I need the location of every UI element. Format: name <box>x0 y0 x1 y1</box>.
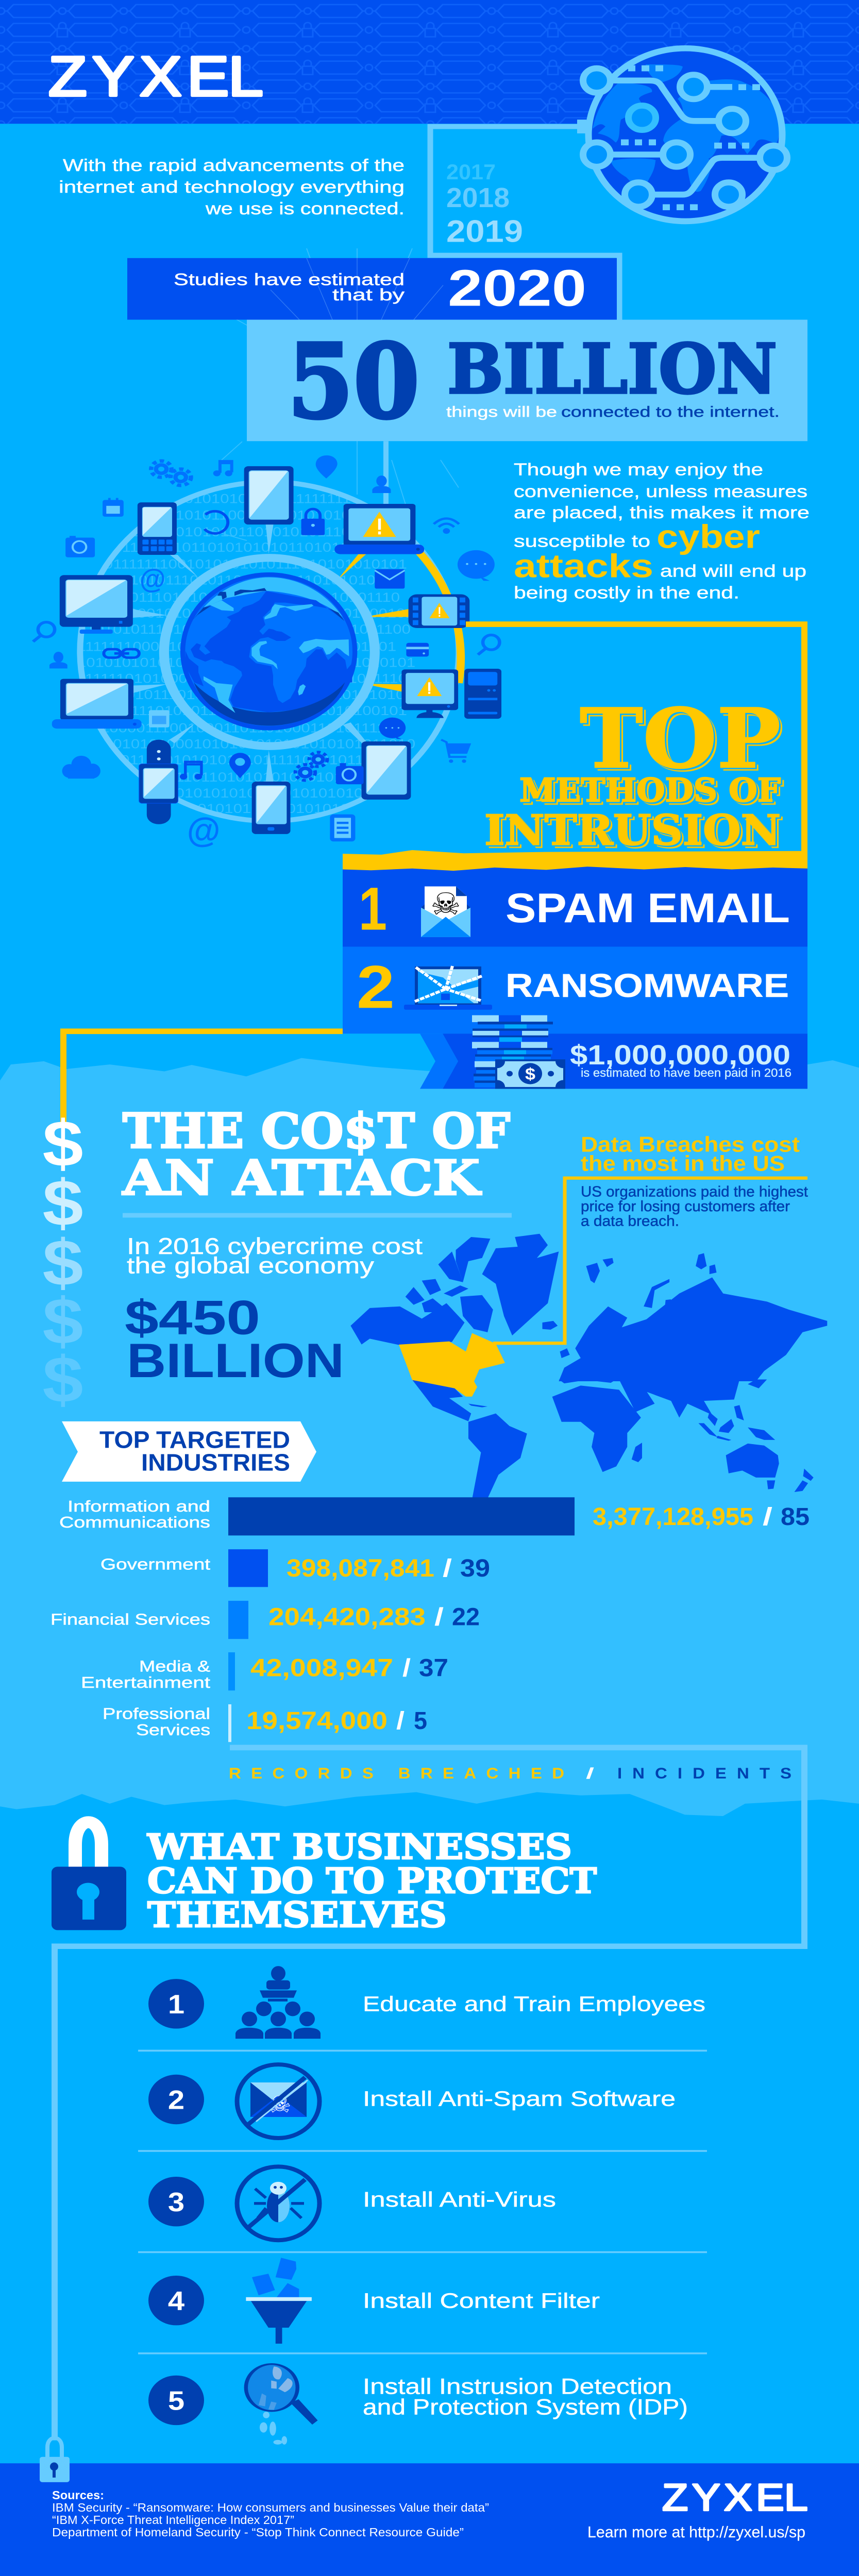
yellow alert arc <box>418 552 461 683</box>
icon: calendar <box>103 498 124 517</box>
warning paragraph: being costly in the end. <box>514 583 739 602</box>
ransom paid ribbon <box>420 1015 807 1089</box>
heading: the cost of an attack: AN ATTACK <box>122 1150 482 1206</box>
icon: money stack <box>472 1015 565 1089</box>
global cost statement: In 2016 cybercrime cost <box>127 1233 423 1259</box>
heading: top methods of intrusion <box>484 690 781 855</box>
dollar signs column: $ <box>43 1107 83 1180</box>
row: information and communications: 3,377,128,955 <box>593 1502 753 1530</box>
step 2: install anti-spam software <box>148 2064 676 2138</box>
icon: camera dark <box>336 763 364 784</box>
intro text: internet and technology everything <box>59 178 405 197</box>
binary digits: 01101011010101010101011111010101110101 <box>77 753 407 767</box>
global cost statement: BILLION <box>127 1334 344 1388</box>
row: government <box>100 1549 490 1587</box>
heading: top methods of intrusion: TOP <box>580 690 781 787</box>
binary digits: 01010101010101011001101101010101010101 <box>77 508 413 522</box>
step 4: install content filter <box>148 2258 600 2344</box>
icon: padlock <box>301 509 325 535</box>
step 2: install anti-spam software: 2 <box>168 2085 184 2115</box>
ice and desert highlights <box>204 600 349 713</box>
dollar signs column: $ <box>43 1284 83 1358</box>
binary digits: 11110000111001000110110100011010111100 <box>77 720 403 735</box>
binary digits: 01010101010001010101010101010101011010 <box>77 737 415 751</box>
icon: refresh <box>205 511 228 533</box>
sources <box>52 2489 489 2539</box>
icon: mail <box>375 569 405 589</box>
small floating icons <box>33 455 499 850</box>
method 1 panel: spam email <box>343 850 807 947</box>
icon: small padlock on line <box>40 2438 70 2482</box>
row: financial services: 22 <box>452 1603 480 1631</box>
icon: chat bubble <box>458 550 495 581</box>
binary digits: 01010111010101101010101011010101010101 <box>77 540 412 554</box>
binary digits: 01000110101110101101111111110101010110 <box>77 572 401 587</box>
list dividers <box>138 2050 707 2354</box>
chart legend: INCIDENTS <box>617 1765 791 1782</box>
icon: money stack: $ <box>525 1065 535 1083</box>
footer band <box>0 2463 859 2576</box>
step 1: educate and train employees <box>148 1966 705 2039</box>
top highlight <box>204 578 343 617</box>
icon: calculator <box>149 710 170 727</box>
ransom paid ribbon: is estimated to have been paid in 2016 <box>581 1066 791 1080</box>
icon: magnifier with footprints <box>246 2364 318 2445</box>
icon: shopping cart <box>441 740 471 763</box>
dollar signs column: $ <box>43 1166 83 1240</box>
intro text: we use is connected. <box>205 199 405 218</box>
icon: person <box>372 476 391 493</box>
row: media and entertainment: / <box>402 1654 411 1682</box>
icon: map pin dark <box>229 753 251 778</box>
binary digits: 01111101011101011100101101010110101010 <box>77 687 405 702</box>
brush band <box>343 850 807 871</box>
icon: large padlock <box>52 1822 126 1930</box>
step 2: install anti-spam software: Install Anti-Spam Software <box>363 2088 676 2111</box>
heading: what businesses can do: CAN DO TO PROTECT <box>147 1860 597 1901</box>
icon: spam envelope <box>421 886 470 937</box>
yellow alert spikes <box>337 554 409 691</box>
heading: top methods of intrusion: METHODS OF <box>519 771 781 809</box>
label ransomware: RANSOMWARE <box>506 967 789 1004</box>
logo: zyxel top: ZYXEL <box>48 45 263 108</box>
binary digits: 01110101110101010101010101010101010101 <box>77 801 412 816</box>
dollar signs column: $ <box>43 1343 83 1416</box>
heading: what businesses can do: THEMSELVES <box>147 1894 447 1935</box>
row: media and entertainment: Entertainment <box>81 1674 210 1691</box>
icon: music note dark <box>180 762 202 779</box>
warning paragraph <box>514 460 810 602</box>
row: government: Government <box>100 1555 210 1573</box>
50 billion box: connected to the internet. <box>561 404 780 420</box>
usa highlight <box>399 1333 505 1397</box>
callout: data breaches: a data breach. <box>581 1213 679 1229</box>
warning paragraph: convenience, unless measures <box>514 482 807 501</box>
outer ring <box>80 482 459 821</box>
icon: laptop left <box>52 679 142 728</box>
step 5: install instrusion detection: 5 <box>168 2386 184 2416</box>
50 billion box: BILLION <box>447 329 777 410</box>
number 1: 1 <box>359 875 387 943</box>
icon: circuit globe <box>577 48 787 221</box>
icon: map pin <box>316 455 338 479</box>
step 5: install instrusion detection <box>148 2364 688 2445</box>
row: information and communications: Communications <box>59 1514 210 1531</box>
binary digits: 10101010101010101011010101011101010111 <box>77 524 411 539</box>
studies box: 2020 <box>448 260 586 317</box>
icon: phone top <box>244 466 294 524</box>
row: media and entertainment: 42,008,947 <box>250 1654 393 1682</box>
step 4: install content filter: Install Content Filter <box>363 2290 600 2313</box>
chart legend: RECORDS BREACHED <box>229 1765 564 1782</box>
binary digits: 10101010101010101010101010101010101010 <box>77 786 416 800</box>
warning paragraph: Though we may enjoy the <box>514 460 763 479</box>
ribbon: top targeted industries <box>62 1421 316 1482</box>
sources: Department of Homeland Security - “Stop Think Connect Resource Guide” <box>52 2526 464 2539</box>
years list: 2018 <box>446 183 510 213</box>
heading: top methods of intrusion: INTRUSION <box>484 806 781 855</box>
dollar signs column <box>43 1107 83 1416</box>
callout: data breaches: the most in the US <box>581 1152 785 1176</box>
inner ring <box>164 558 375 746</box>
connector frame: chart to protection section <box>55 1748 804 2441</box>
sources: Sources: <box>52 2489 104 2502</box>
learn more link: Learn more at http://zyxel.us/sp <box>587 2523 805 2541</box>
years list: 2019 <box>446 214 523 249</box>
row: information and communications <box>59 1497 810 1535</box>
icon: gears dark <box>295 752 327 781</box>
yellow connector: usa to callout <box>493 1178 807 1343</box>
bottom shadow <box>194 682 345 726</box>
middle lighter wave background <box>0 1058 859 1816</box>
icon: blocked spam envelope: ☠ <box>268 2091 291 2118</box>
icon: teacher and audience <box>235 1966 321 2039</box>
icon: film tablet with warning <box>409 595 469 628</box>
step 4: install content filter: 4 <box>168 2286 185 2316</box>
row: professional services: Services <box>136 1721 210 1738</box>
bar chart: targeted industries <box>50 1497 810 1742</box>
icon: desktop tower <box>464 669 501 719</box>
icon: cloud <box>62 756 100 778</box>
land masses <box>191 591 352 712</box>
studies box: Studies have estimated <box>174 270 405 289</box>
icon: chain link <box>104 649 139 657</box>
callout: data breaches: Data Breaches cost <box>581 1133 800 1157</box>
icon: credit card <box>406 643 429 657</box>
warning paragraph: cyber <box>656 518 760 555</box>
binary digits: 01100001110101011010101111111110101110 <box>77 590 400 604</box>
heading: what businesses can do: WHAT BUSINESSES <box>147 1826 572 1867</box>
row: government: / <box>443 1554 452 1582</box>
icon: at sign bottom: @ <box>187 811 220 850</box>
binary digits: 11111101010001010101010101010101011110 <box>77 671 407 686</box>
row: media and entertainment: 37 <box>419 1654 448 1682</box>
number 2: 2 <box>357 953 395 1021</box>
icon: music note <box>213 461 232 476</box>
row: financial services <box>50 1601 480 1639</box>
icon: smartwatch <box>139 740 178 824</box>
heading: the cost of an attack: THE CO$T OF <box>123 1103 510 1159</box>
step 5: install instrusion detection: Install Instrusion Detection <box>363 2374 672 2399</box>
ribbon: top targeted industries: TOP TARGETED <box>99 1427 290 1453</box>
row: professional services: / <box>396 1707 405 1735</box>
binary digits: 01010101000110110101010101010101010110 <box>77 770 413 784</box>
connected world illustration <box>77 482 461 821</box>
connected devices and icons <box>33 455 501 850</box>
yellow frame around methods <box>466 624 804 856</box>
icon: monitor left <box>60 575 133 634</box>
binary digits <box>77 492 416 816</box>
icon: at sign: @ <box>140 564 165 594</box>
years list: 2017 <box>446 160 496 184</box>
icon: wifi <box>434 518 459 533</box>
heading divider <box>123 1213 512 1217</box>
binary digits: 01010101010101010101011111111111010101 <box>77 492 405 506</box>
row: media and entertainment <box>81 1652 448 1691</box>
ribbon: top targeted industries: INDUSTRIES <box>141 1449 290 1476</box>
icon: keypad phone <box>138 502 177 555</box>
studies box <box>127 258 617 320</box>
step 3: install anti-virus <box>148 2166 556 2240</box>
callout: data breaches <box>581 1133 809 1229</box>
binary digits: 11111110000101011110111101011111101001 <box>77 639 396 654</box>
step 1: educate and train employees: Educate and Train Employees <box>363 1993 705 2016</box>
chart legend: / <box>586 1765 595 1782</box>
ransom paid ribbon: $1,000,000,000 <box>570 1040 790 1071</box>
header band <box>0 0 859 124</box>
icon: chat dark <box>379 718 406 739</box>
row: financial services: / <box>434 1603 444 1631</box>
50 billion box: 50 <box>288 321 419 442</box>
dark slivers <box>192 588 344 621</box>
icon: gears top <box>151 461 191 485</box>
label spam email: SPAM EMAIL <box>506 886 790 931</box>
sources: IBM Security - “Ransomware: How consumers and businesses Value their data” <box>52 2501 489 2515</box>
globe <box>180 572 357 731</box>
row: information and communications: Information and <box>68 1498 210 1515</box>
row: financial services: Financial Services <box>50 1611 210 1628</box>
step 3: install anti-virus: 3 <box>168 2187 184 2217</box>
50 billion box <box>247 320 807 442</box>
binary digits: 01011100010101010101010101010101000101 <box>77 606 414 620</box>
icon: camera <box>65 536 95 557</box>
callout: data breaches: price for losing customers after <box>581 1198 790 1214</box>
icon: magnifier left <box>33 622 55 641</box>
binary digits: 10101011101010111101011101011010100101 <box>77 703 407 718</box>
warning paragraph: attacks <box>514 548 653 585</box>
warning paragraph: are placed, this makes it more <box>514 503 810 522</box>
callout: data breaches: US organizations paid the highest <box>581 1184 809 1200</box>
row: media and entertainment: Media & <box>139 1657 210 1675</box>
sources: “IBM X-Force Threat Intelligence Index 2017” <box>52 2514 294 2527</box>
row: information and communications: 85 <box>781 1502 810 1530</box>
row: professional services: 19,574,000 <box>246 1707 388 1735</box>
step 5: install instrusion detection: and Protection System (IDP) <box>363 2395 688 2419</box>
icon: tablet bottom right <box>361 741 411 800</box>
ring spikes <box>133 524 367 782</box>
connector: 50 billion to laptop <box>383 441 389 505</box>
logo: zyxel footer: ZYXEL <box>662 2477 808 2518</box>
icon: laptop with warning <box>334 504 424 554</box>
heading: what businesses can do <box>147 1826 597 1935</box>
warning paragraph: and will end up <box>660 562 806 581</box>
row: professional services <box>103 1704 427 1742</box>
intro text <box>59 156 405 218</box>
icon: phone bottom <box>252 782 291 834</box>
heading: the cost of an attack <box>122 1103 510 1206</box>
binary digits: 10101010101001010101010101011001010101 <box>77 655 415 670</box>
row: government: 39 <box>460 1554 490 1582</box>
icon: chained laptop <box>404 966 492 1010</box>
step 3: install anti-virus: Install Anti-Virus <box>363 2188 556 2211</box>
method 2 panel: ransomware <box>343 947 807 1033</box>
icon: blocked bug <box>237 2166 319 2240</box>
icon: monitor with warning <box>401 669 458 718</box>
icon: content filter funnel <box>246 2258 312 2344</box>
icon: magnifier right <box>478 635 499 655</box>
step 1: educate and train employees: 1 <box>168 1989 184 2019</box>
icon: person left <box>49 652 68 669</box>
50 billion box: things will be <box>446 404 557 420</box>
row: information and communications: / <box>763 1502 772 1530</box>
icon: spam envelope: ☠ <box>430 886 461 922</box>
yellow connector: to cost section <box>63 1031 343 1123</box>
binary digits: 01010101110101010101010110100101011100 <box>77 622 411 636</box>
connector frame: years <box>430 127 619 322</box>
global cost statement: the global economy <box>127 1253 374 1279</box>
warning paragraph: susceptible to <box>514 532 650 551</box>
icon: blocked spam envelope <box>237 2064 319 2138</box>
world map <box>350 1234 827 1498</box>
dollar signs column: $ <box>43 1226 83 1299</box>
icon: document <box>330 815 355 841</box>
global cost statement: $450 <box>125 1291 260 1345</box>
years list <box>446 160 523 249</box>
chart legend <box>229 1765 791 1782</box>
global cost statement <box>125 1233 423 1388</box>
intro text: With the rapid advancements of the <box>63 156 405 175</box>
row: financial services: 204,420,283 <box>268 1603 426 1631</box>
row: government: 398,087,841 <box>287 1554 434 1582</box>
studies box: that by <box>332 286 405 304</box>
thin rays from globe <box>206 248 459 598</box>
row: professional services: 5 <box>414 1707 427 1735</box>
binary digits: 10101111111001010101010111010101010101 <box>77 556 407 571</box>
row: professional services: Professional <box>103 1705 210 1722</box>
